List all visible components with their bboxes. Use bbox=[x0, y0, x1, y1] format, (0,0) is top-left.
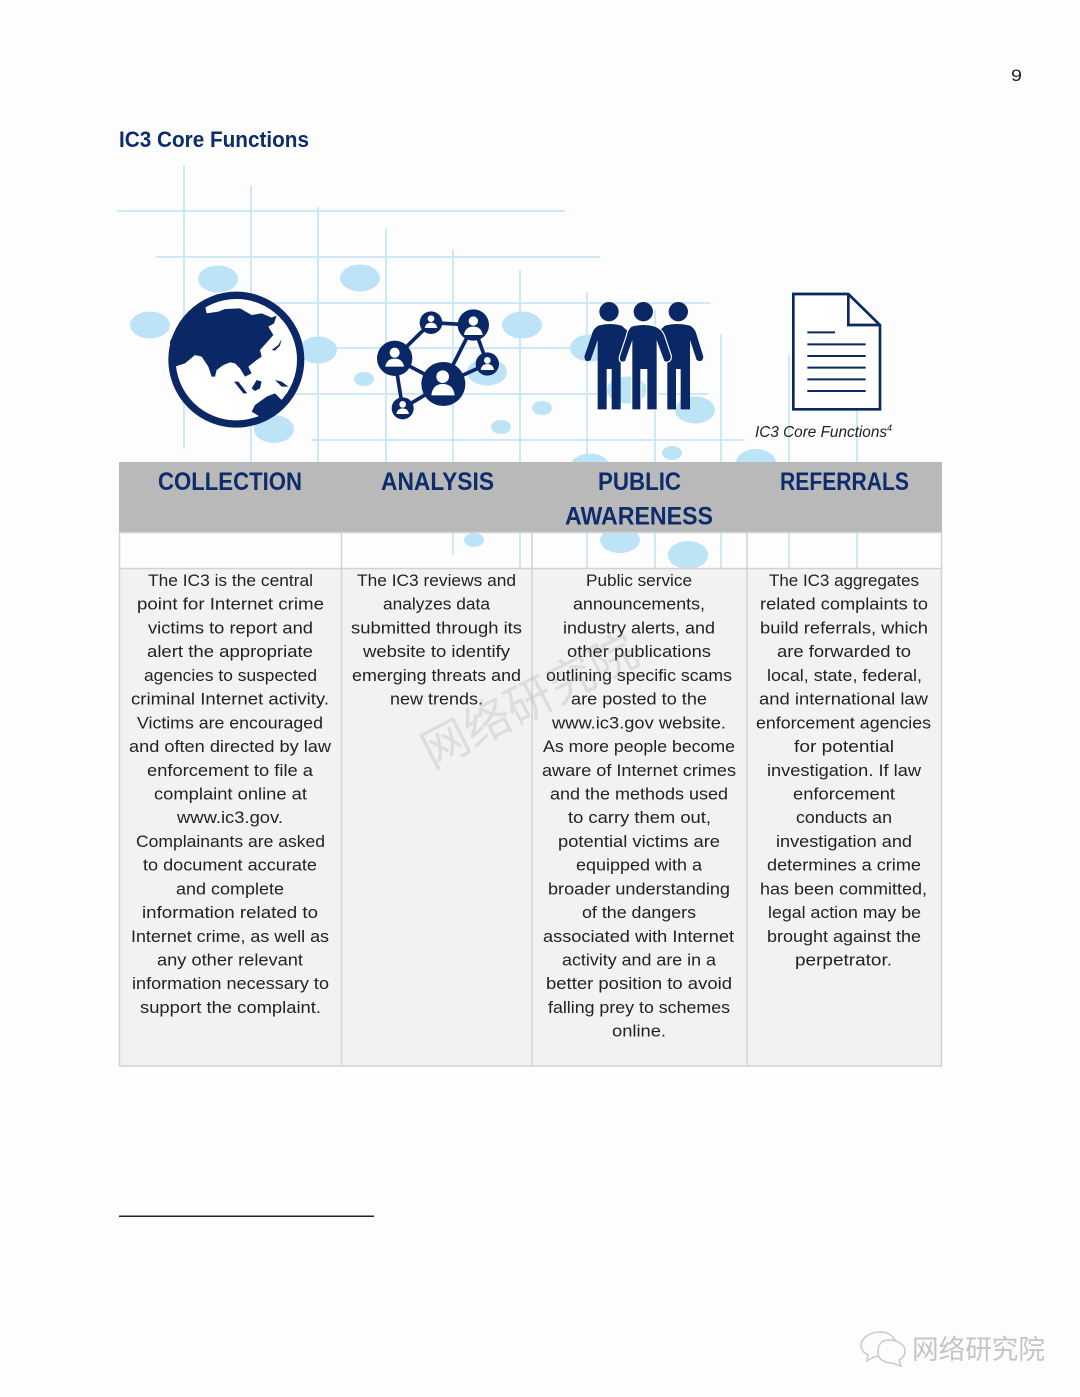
text: collection description: Complainants are asked bbox=[136, 832, 325, 851]
text: collection description: information necessary to bbox=[132, 974, 329, 993]
header: referrals: REFERRALS bbox=[780, 468, 909, 496]
text: analysis description: new trends. bbox=[390, 690, 483, 709]
text: referrals description: and international law bbox=[759, 690, 929, 709]
watermark: 网络研究院 bbox=[407, 613, 648, 781]
watermark label: 网络研究院 bbox=[912, 1328, 1045, 1367]
text: public awareness description: broader understanding bbox=[548, 879, 730, 898]
text: public awareness description: online. bbox=[612, 1022, 666, 1041]
text: collection description: The IC3 is the central bbox=[148, 571, 313, 590]
title: IC3 Core Functions bbox=[119, 127, 309, 152]
table body background bbox=[119, 568, 942, 1066]
text: referrals description: investigation. If law bbox=[767, 761, 922, 780]
text: collection description: www.ic3.gov. bbox=[176, 808, 283, 827]
text: analysis description: The IC3 reviews and bbox=[357, 571, 516, 590]
text: collection description: information related to bbox=[142, 903, 318, 922]
text: referrals description: perpetrator. bbox=[795, 950, 892, 970]
text: collection description: Victims are encouraged bbox=[137, 713, 323, 732]
text: public awareness description: and the methods used bbox=[550, 784, 728, 804]
text: public awareness description: As more people become bbox=[543, 737, 735, 756]
text: public awareness description: activity and are in a bbox=[562, 950, 717, 970]
header: public awareness bbox=[565, 468, 713, 530]
caption: IC3 Core Functions bbox=[755, 424, 887, 441]
text: referrals description: determines a crime bbox=[767, 856, 921, 875]
header: collection: COLLECTION bbox=[158, 468, 302, 496]
text: public awareness description: industry alerts, and bbox=[563, 618, 715, 637]
text: referrals description: related complaints to bbox=[760, 595, 928, 614]
text: referrals description: enforcement bbox=[793, 784, 895, 804]
icon: document bbox=[793, 294, 880, 409]
header: public awareness: AWARENESS bbox=[565, 502, 713, 530]
text: public awareness description: equipped with a bbox=[576, 856, 703, 875]
text: collection description: criminal Internet activity. bbox=[131, 690, 329, 709]
text: collection description: complaint online at bbox=[154, 784, 307, 804]
text: referrals description: enforcement agencies bbox=[756, 713, 931, 732]
text: referrals description: local, state, federal, bbox=[767, 666, 922, 685]
text: analysis description bbox=[351, 571, 522, 709]
text: referrals description: build referrals, which bbox=[760, 618, 928, 637]
text: public awareness description: to carry them out, bbox=[568, 808, 711, 827]
text: collection description: and often directed by law bbox=[129, 737, 332, 756]
text: analysis description: website to identify bbox=[362, 642, 511, 661]
icon: globe bbox=[170, 295, 301, 424]
text: collection description: agencies to suspected bbox=[144, 666, 317, 685]
text: collection description: enforcement to file a bbox=[147, 761, 314, 780]
text: collection description: alert the appropriate bbox=[147, 642, 313, 661]
text: collection description: to document accurate bbox=[143, 856, 317, 875]
footnote rule bbox=[119, 1216, 374, 1217]
table: core functions bbox=[119, 462, 942, 1066]
text: collection description: support the complaint. bbox=[140, 998, 321, 1017]
watermark logo: chat bubbles bbox=[861, 1332, 905, 1366]
text: referrals description: conducts an bbox=[796, 808, 892, 827]
page number: 9 bbox=[1011, 66, 1022, 85]
text: public awareness description: aware of Internet crimes bbox=[542, 761, 736, 780]
text: referrals description: for potential bbox=[794, 737, 894, 756]
text: referrals description: brought against the bbox=[767, 927, 921, 946]
text: public awareness description: are posted to the bbox=[571, 690, 707, 709]
icon: network of people bbox=[377, 309, 499, 419]
table header band bbox=[119, 462, 942, 532]
text: analysis description: analyzes data bbox=[383, 595, 491, 614]
text: public awareness description: Public service bbox=[586, 571, 692, 590]
caption: 4 bbox=[887, 423, 892, 433]
text: referrals description: has been committed, bbox=[760, 879, 927, 898]
background: grid and dots pattern bbox=[117, 165, 857, 569]
text: analysis description: emerging threats and bbox=[352, 666, 521, 685]
text: collection description: victims to report and bbox=[148, 618, 313, 637]
text: analysis description: submitted through its bbox=[351, 618, 522, 637]
text: referrals description bbox=[756, 571, 931, 970]
text: public awareness description: potential victims are bbox=[558, 832, 720, 851]
text: collection description bbox=[129, 571, 332, 1017]
header: analysis: ANALYSIS bbox=[381, 468, 494, 496]
text: referrals description: legal action may be bbox=[768, 903, 921, 922]
text: collection description: and complete bbox=[176, 879, 284, 898]
header: public awareness: PUBLIC bbox=[598, 468, 681, 496]
text: referrals description: are forwarded to bbox=[777, 642, 911, 661]
text: public awareness description: of the dangers bbox=[582, 903, 696, 922]
text: public awareness description bbox=[542, 571, 736, 1041]
text: public awareness description: other publications bbox=[567, 642, 711, 661]
text: public awareness description: falling prey to schemes bbox=[548, 998, 730, 1017]
text: collection description: any other relevant bbox=[157, 950, 303, 970]
text: referrals description: The IC3 aggregates bbox=[769, 571, 919, 590]
text: public awareness description: www.ic3.gov website. bbox=[551, 713, 726, 732]
text: referrals description: investigation and bbox=[776, 832, 912, 851]
text: collection description: point for Internet crime bbox=[137, 595, 324, 614]
text: public awareness description: announcements, bbox=[573, 595, 705, 614]
text: collection description: Internet crime, as well as bbox=[131, 927, 329, 946]
icon: three people bbox=[584, 302, 703, 409]
text: public awareness description: better position to avoid bbox=[546, 974, 732, 993]
text: public awareness description: outlining specific scams bbox=[546, 666, 732, 685]
text: public awareness description: associated with Internet bbox=[543, 927, 734, 946]
